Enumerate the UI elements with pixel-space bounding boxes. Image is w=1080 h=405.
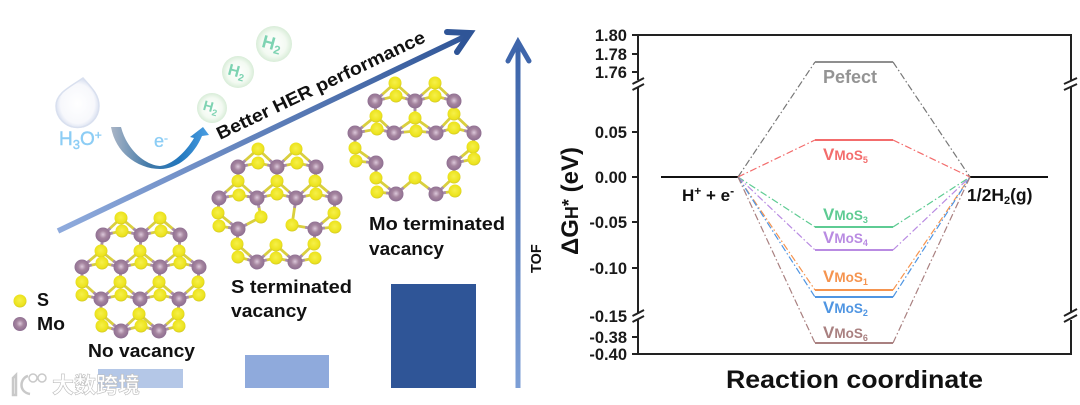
- bubble: medium H2: [222, 56, 254, 88]
- label: S terminated vacancy: vacancy: [231, 301, 307, 321]
- y-axis tick labels: 0.00: [595, 169, 627, 187]
- level: VMoS4: VMoS: [823, 228, 863, 247]
- label: H+ + e-: -: [730, 184, 734, 198]
- watermark text: 大数跨境: [52, 368, 140, 400]
- y-axis title: ΔGH: [557, 206, 584, 255]
- label: H3O+: O: [80, 129, 95, 150]
- y-axis tick labels: -0.15: [589, 308, 627, 326]
- bubble: large H2: [256, 26, 292, 62]
- level: Pefect: Pefect: [823, 67, 877, 87]
- label: H+ + e-: +: [694, 184, 701, 198]
- y-axis tick labels: 1.76: [595, 64, 627, 82]
- level: VMoS3: [738, 177, 970, 227]
- y-axis tick labels: [589, 27, 627, 364]
- y-axis tick labels: -0.10: [589, 260, 627, 278]
- label: Mo terminated vacancy: [369, 214, 505, 259]
- bar: no vacancy TOF: [98, 369, 183, 388]
- bar: S terminated TOF: [245, 355, 329, 388]
- watermark logo: [13, 374, 46, 395]
- level: VMoS2: [738, 177, 970, 318]
- level: VMoS5: VMoS: [823, 145, 863, 164]
- legend: atom types: [13, 290, 65, 334]
- label: 1/2H2(g): 1/2H: [967, 185, 1004, 205]
- y-axis tick labels: 0.05: [595, 124, 627, 142]
- bubble: medium H2: H: [226, 62, 242, 81]
- trend arrow label: Better HER performance: [213, 27, 428, 144]
- structure: S terminated vacancy: [212, 142, 342, 270]
- level: Pefect: [738, 62, 970, 177]
- icon: water droplet: [56, 78, 99, 127]
- level: VMoS5: [738, 140, 970, 177]
- bar: Mo terminated TOF: [391, 284, 476, 388]
- y-axis title: (eV): [557, 147, 584, 199]
- arrow: TOF axis: [508, 42, 529, 388]
- y-axis tick labels: -0.05: [589, 214, 627, 232]
- level: VMoS3: 3: [863, 215, 868, 225]
- label: H+ + e-: H: [682, 186, 694, 205]
- label: S terminated vacancy: [231, 277, 352, 321]
- label: TOF: TOF: [529, 244, 545, 273]
- arrow: curved electron transfer: [111, 127, 209, 169]
- y-axis tick labels: -0.40: [589, 346, 627, 364]
- label: 1/2H2(g): 2: [1004, 195, 1010, 207]
- label: electron: e: [154, 131, 164, 151]
- chart frame and axis breaks: [632, 35, 1077, 354]
- label: H3O+: H: [59, 129, 73, 150]
- arrow: better HER performance trend: [58, 32, 470, 231]
- level: VMoS3: VMoS: [823, 205, 863, 224]
- level: VMoS6: [738, 177, 970, 343]
- label: Mo terminated vacancy: vacancy: [369, 239, 444, 259]
- structure: Mo terminated vacancy: [348, 76, 482, 202]
- level: VMoS1: 1: [863, 277, 868, 287]
- reference levels at zero: [661, 176, 1048, 178]
- y-axis tick labels: 1.80: [595, 27, 627, 45]
- level: VMoS2: VMoS: [823, 298, 863, 317]
- structure: no vacancy: [74, 212, 206, 338]
- label: electron: -: [164, 131, 168, 145]
- label: H3O+: +: [95, 128, 102, 142]
- bubble: medium H2: 2: [237, 72, 245, 85]
- bubble: large H2: 2: [272, 42, 282, 58]
- level: VMoS4: [738, 177, 970, 250]
- level: VMoS4: 4: [863, 238, 868, 248]
- level: VMoS1: [738, 177, 970, 290]
- label: H+ + e-: + e: [701, 186, 730, 205]
- bubble: small H2: [197, 93, 227, 123]
- legend: atom types: Mo: [37, 314, 65, 334]
- label: no vacancy: No vacancy: [88, 341, 195, 361]
- bubble: small H2: H: [201, 97, 215, 115]
- bubble: large H2: H: [260, 31, 278, 54]
- y-axis tick labels: -0.38: [589, 329, 627, 347]
- level: VMoS1: VMoS: [823, 267, 863, 286]
- chart: free energy diagram: [557, 27, 1077, 394]
- x-axis title: Reaction coordinate: [726, 366, 983, 394]
- level: VMoS6: 6: [863, 333, 868, 343]
- label: Mo terminated vacancy: Mo terminated: [369, 214, 505, 234]
- bubble: small H2: 2: [211, 107, 218, 118]
- label: 1/2H2(g): (g): [1010, 185, 1032, 205]
- label: H3O+: 3: [73, 137, 80, 152]
- y-axis title: *: [559, 199, 579, 206]
- level: VMoS5: 5: [863, 155, 868, 165]
- level: VMoS2: 2: [863, 308, 868, 318]
- y-axis tick labels: 1.78: [595, 46, 627, 64]
- legend: atom types: S: [37, 290, 49, 310]
- level: VMoS6: VMoS: [823, 323, 863, 342]
- label: S terminated vacancy: S terminated: [231, 277, 352, 297]
